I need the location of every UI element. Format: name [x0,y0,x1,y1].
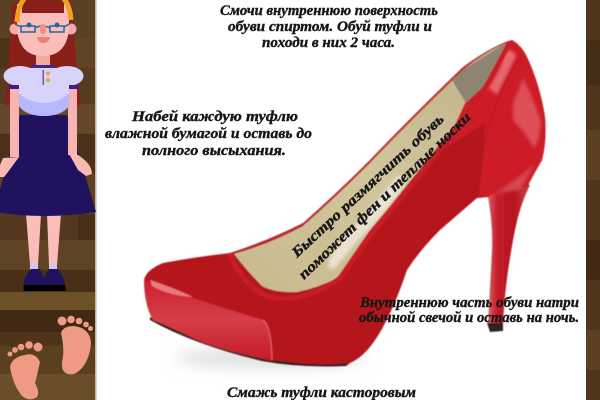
sole [150,317,350,366]
panel: right wood floor [586,0,600,400]
panel: left wood floor [0,0,96,400]
text: tip along the shoe lining: Быстро размягчить обувь [288,111,448,262]
hands [0,152,92,177]
toe cap [144,279,272,361]
illustration: red high-heel shoe [144,40,546,366]
glasses [15,23,71,32]
heel tip [487,323,503,332]
lining [234,42,507,292]
skirt [0,115,96,216]
text: left tip: Набей каждую туфлю [131,109,298,125]
text: right tip: Внутреннюю часть обуви натри [359,295,579,311]
toe highlight [150,280,193,297]
top edge trim [234,41,510,253]
text: top tip [220,3,438,51]
arms [10,86,77,157]
blouse [4,65,84,116]
hairband [17,0,71,22]
mouth [37,37,50,43]
collar trim [230,42,510,299]
upper suede [144,40,546,364]
heel [488,170,530,323]
nose [40,24,46,34]
inner heel lining shade [452,42,507,103]
text: left tip: влажной бумагой и оставь до [105,126,312,142]
fringe [22,4,64,13]
text: tip along the shoe lining: поможет фен и теплые носки [296,110,474,283]
illustration: girl [0,0,96,291]
face [17,4,69,56]
text: top tip: Смочи внутреннюю поверхность [220,3,438,19]
text: right tip [359,295,579,326]
icon: left footprint [8,341,42,399]
ears [10,24,20,34]
neck [36,52,50,66]
text: left tip: полного высыхания. [142,143,286,159]
shoe shadow [175,347,365,369]
text: top tip: обуви спиртом. Обуй туфли и [228,19,432,35]
patent back counter [447,40,546,198]
eyes [26,22,32,28]
seam [478,55,523,197]
lining highlight [328,175,406,269]
legs [26,214,61,270]
hair back [5,0,81,105]
shoes [24,269,66,291]
text: left tip [105,109,312,159]
patent highlights [488,50,541,195]
icon: right footprint [58,316,93,374]
text: top tip: походи в них 2 часа. [262,35,395,51]
text: right tip: обычной свечой и оставь на ночь. [359,310,579,326]
